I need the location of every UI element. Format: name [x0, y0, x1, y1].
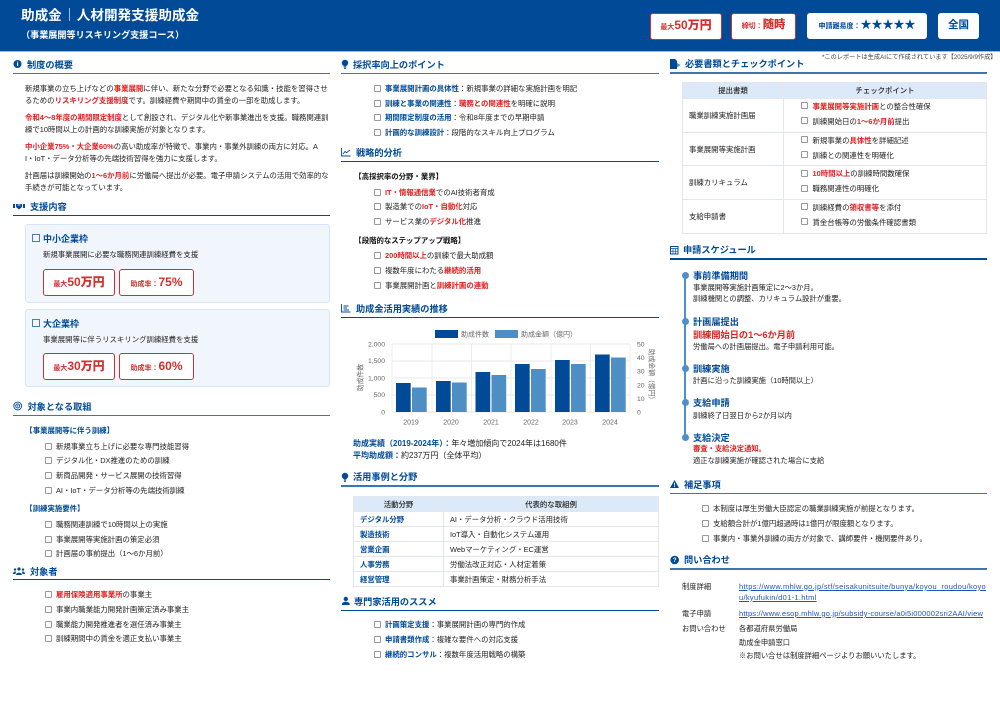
step: training: 訓練実施	[693, 364, 730, 374]
list: requirements: 職務関連訓練で10時間以上の実施	[56, 520, 168, 529]
icon: light bulb	[342, 472, 348, 482]
table: 労働法改正対応・人材定着策	[450, 560, 546, 568]
step: claim: 支給申請	[693, 398, 730, 408]
badge: max	[43, 269, 115, 296]
panel: eligible activities	[13, 402, 330, 558]
x axis: 2019	[403, 420, 419, 426]
x axis: 2022	[523, 420, 539, 426]
card description: 新規事業展開に必要な職務関連訓練経費を支援	[43, 250, 198, 259]
checklist table: 訓練カリキュラム	[689, 178, 748, 187]
contact: details URL: 制度詳細	[682, 582, 711, 591]
heading: 補足事項	[684, 480, 721, 490]
list	[670, 502, 987, 544]
table: 経営管理	[360, 574, 390, 584]
list: 訓練と事業の関連性：職務との関連性を明確に説明	[385, 99, 555, 108]
contact: inquiries: 各都道府県労働局	[739, 624, 797, 633]
panel: supplementary notes	[670, 477, 987, 545]
badge: difficulty	[807, 13, 927, 38]
checklist table: 事業展開等実施計画との整合性確保	[812, 102, 931, 111]
badge: max: 最大30万円	[53, 359, 105, 373]
list: training: 新商品開発・サービス展開の技術習得	[56, 471, 182, 480]
heading: 活用事例と分野	[353, 472, 417, 482]
checklist table: 訓練開始日の1〜6か月前提出	[812, 117, 909, 126]
checklist table: 訓練経費の領収書等を添付	[812, 203, 901, 212]
heading: 専門家活用のススメ	[354, 597, 437, 607]
step: plan submission	[682, 317, 839, 351]
checklist table: 職業訓練実施計画届	[689, 111, 756, 120]
table: AI・データ分析・クラウド活用技術	[450, 514, 568, 524]
list	[45, 590, 189, 643]
badge: difficulty: 申請難易度：★★★★★	[818, 19, 916, 31]
table: 製造技術	[360, 530, 390, 538]
left axis: 500	[374, 392, 385, 399]
card: SME	[25, 224, 330, 303]
table: 営業企画	[360, 544, 390, 554]
list: 雇用保険適用事業所の事業主	[56, 590, 152, 599]
chart summary	[353, 439, 567, 460]
step: preparation: 事業展開等実施計画策定に2〜3か月。	[693, 283, 818, 292]
card description: 事業展開等に伴うリスキリング訓練経費を支援	[43, 335, 198, 344]
list: 期間限定制度の活用：令和8年度までの早期申請	[385, 113, 544, 122]
badge: maximum amount: 最大50万円	[660, 18, 712, 32]
x axis	[403, 420, 618, 426]
step: preparation: 事前準備期間	[693, 271, 748, 281]
icon: people	[13, 567, 25, 575]
list: 訓練期間中の賃金を適正支払い事業主	[56, 634, 182, 643]
panel: overview	[13, 60, 330, 192]
title: 助成金 人材開発支援助成金	[21, 8, 199, 23]
badge: rate: 助成率：60%	[130, 359, 183, 373]
table: デジタル分野	[360, 514, 404, 524]
table: IoT導入・自動化システム運用	[450, 530, 549, 538]
contact: inquiries: ※お問い合せは制度詳細ページよりお願いいたします。	[739, 651, 920, 660]
list: sectors: IT・情報通信業でのAI技術者育成	[385, 188, 495, 197]
panel: application schedule	[670, 245, 987, 465]
list: 計画策定支援：事業展開計画の専門的作成	[385, 620, 525, 629]
step: claim: 訓練終了日翌日から2か月以内	[693, 411, 792, 420]
icon: info	[14, 60, 22, 68]
table: 代表的な取組例	[525, 500, 577, 508]
heading: 採択率向上のポイント	[353, 60, 445, 70]
overview text: 新規事業の立ち上げなどの事業展開に伴い、新たな分野で必要となる知識・技能を習得させ	[25, 84, 328, 93]
list: step-up: 事業展開計画と訓練計画の連動	[385, 281, 488, 290]
right axis: 40	[637, 355, 645, 362]
overview text: I・IoT・データ分析等の先端技術習得を強力に支援します。	[25, 154, 222, 163]
left axis: 1,000	[368, 376, 385, 382]
contact: inquiries: お問い合わせ	[682, 624, 726, 633]
checklist table: 提出書類	[718, 86, 748, 95]
badge: deadline: 締切：随時	[742, 19, 785, 31]
card title: 大企業枠	[43, 318, 79, 328]
checklist table: チェックポイント	[855, 86, 915, 95]
step: plan submission: 労働局への計画届提出。電子申請利用可能。	[693, 342, 839, 351]
panel: expert use	[341, 596, 659, 659]
contact: details URL: u/kyufukin/d01-1.html	[739, 593, 817, 602]
heading: 助成金活用実績の推移	[356, 304, 448, 314]
checklist table: 事業展開等実施計画	[689, 145, 756, 154]
heading: 対象者	[30, 567, 58, 577]
checklist table: 10時間以上の訓練時間数確保	[812, 169, 909, 178]
heading: 戦略的分析	[356, 148, 402, 158]
badge: max: 最大50万円	[53, 275, 105, 289]
x axis: 2021	[483, 420, 499, 426]
timeline line	[684, 275, 686, 437]
chart summary: 平均助成額：約237万円（全体平均）	[353, 451, 486, 460]
checklist table: 支給申請書	[689, 212, 726, 221]
left axis: 助成件数	[356, 364, 364, 391]
panel: adoption tips	[341, 60, 659, 137]
icon: target	[13, 402, 22, 410]
list: training: デジタル化・DX推進のための訓練	[56, 456, 170, 465]
left axis: 2,000	[368, 342, 385, 348]
step: decision	[670, 431, 987, 467]
table: Webマーケティング・EC運営	[450, 544, 549, 554]
panel: strategic analysis	[341, 148, 659, 290]
list: training: AI・IoT・データ分析等の先端技術訓練	[56, 486, 185, 495]
contact: inquiries: 助成金申請窓口	[739, 638, 790, 647]
list: sectors: 製造業でのIoT・自動化対応	[385, 202, 477, 211]
step: plan submission: 訓練開始日の1〜6か月前	[693, 330, 795, 340]
list: step-up: 複数年度にわたる継続的活用	[385, 266, 481, 275]
right axis	[637, 342, 656, 416]
bar chart	[356, 330, 656, 426]
table	[353, 496, 659, 587]
list: 支給額合計が1億円超過時は1億円が限度額となります。	[713, 519, 898, 528]
table: 活動分野	[384, 500, 413, 508]
checklist table: 賃金台帳等の労働条件確認書類	[812, 218, 916, 227]
badge: max	[43, 353, 115, 380]
heading: 問い合わせ	[684, 555, 730, 565]
subheading: 【事業展開等に伴う訓練】	[25, 426, 114, 435]
step: plan submission: 計画届提出	[693, 317, 739, 327]
icon: light bulb	[342, 60, 348, 69]
contact: e-application URL: https://www.esop.mhlw.go.jp/subsidy-course/a0i5i000002sri2AAI/view	[739, 609, 983, 618]
panel: required documents	[670, 59, 987, 234]
AI generation note: *このレポートは生成AIにて作成されています【2025/9/9作成】	[822, 54, 996, 61]
bars: grant amount	[412, 358, 626, 412]
badge: maximum amount	[650, 13, 722, 40]
legend: 助成金額（億円）	[521, 330, 577, 338]
right axis: 30	[637, 368, 645, 376]
badge: region: 全国	[948, 19, 969, 31]
step: preparation	[682, 271, 846, 303]
panel: target persons	[13, 567, 330, 643]
left axis: 1,500	[368, 358, 385, 365]
contact: details URL: https://www.mhlw.go.jp/stf/seisakunitsuite/bunya/koyou_roudou/koyo	[739, 582, 986, 591]
heading: 支援内容	[30, 202, 67, 212]
contact: e-application URL: 電子申請	[682, 609, 711, 618]
badge: rate: 助成率：75%	[130, 275, 183, 289]
list	[374, 84, 577, 137]
step: decision: 支給決定	[693, 433, 730, 443]
checklist table: 訓練との関連性を明確化	[812, 151, 894, 160]
icon: question: ?	[673, 558, 677, 564]
checklist table: 職務関連性の明確化	[812, 184, 879, 193]
chart summary: 助成実績（2019-2024年）：年々増加傾向で2024年は1680件	[353, 439, 567, 448]
list: 本制度は厚生労働大臣認定の職業訓練実施が前提となります。	[713, 504, 919, 513]
card title: 中小企業枠	[43, 234, 88, 244]
list: training: 新規事業立ち上げに必要な専門技能習得	[56, 442, 189, 451]
overview text: 練で10時間以上の計画的な訓練実施が対象となります。	[25, 125, 210, 134]
overview text: るためのリスキリング支援制度です。訓練経費や期間中の賃金の一部を助成します。	[25, 96, 304, 105]
badge: region	[938, 13, 979, 38]
icon: warning	[670, 479, 680, 489]
table: 人事労務	[360, 560, 390, 568]
step: claim	[670, 396, 987, 421]
left axis: 0	[381, 410, 385, 416]
list: requirements: 事業展開等実施計画の策定必須	[56, 535, 159, 544]
x axis: 2020	[443, 420, 459, 426]
x axis: 2023	[562, 420, 578, 426]
panel: use cases	[341, 472, 659, 587]
list: step-up: 200時間以上の訓練で最大助成額	[385, 251, 493, 260]
list: 計画的な訓練設計：段階的なスキル向上プログラム	[385, 128, 555, 137]
overview text: 手続きが可能となっています。	[25, 183, 127, 192]
list: 継続的コンサル：複数年度活用戦略の構築	[385, 650, 525, 659]
x axis: 2024	[602, 420, 618, 426]
left axis	[356, 342, 385, 416]
icon: calendar	[670, 246, 678, 254]
list: sectors: サービス業のデジタル化推進	[385, 217, 481, 226]
icon: document	[670, 59, 680, 69]
bars: grants count	[396, 354, 610, 412]
heading: 制度の概要	[27, 60, 73, 70]
step: decision: 適正な訓練実施が確認された場合に支給	[693, 456, 824, 465]
panel: contact	[670, 552, 987, 662]
header band	[0, 0, 1000, 52]
list: requirements: 計画届の事前提出（1〜6か月前）	[56, 549, 168, 558]
subheading: 【訓練実施要件】	[25, 504, 84, 513]
subheading: 【高採択率の分野・業界】	[354, 172, 443, 181]
right axis: 助成金額（億円）	[648, 349, 656, 403]
heading: 対象となる取組	[28, 402, 92, 412]
badge: rate	[119, 269, 194, 296]
badge: deadline	[731, 13, 796, 40]
right axis: 10	[637, 396, 645, 403]
overview text	[25, 84, 329, 192]
step: preparation: 訓練機関との調整、カリキュラム設計が重要。	[693, 294, 846, 303]
list: requirements	[45, 520, 168, 558]
overview text: 令和4〜8年度の期間限定制度として創設され、デジタル化や新事業進出を支援。職務関連訓	[25, 113, 329, 122]
legend: 助成件数	[461, 330, 489, 338]
checklist table	[682, 82, 987, 234]
contact: inquiries	[670, 622, 987, 661]
contact: e-application URL	[670, 607, 987, 619]
card: large enterprise	[25, 309, 330, 387]
contact: details URL	[670, 580, 987, 603]
right axis: 20	[637, 382, 645, 390]
list: 職業能力開発推進者を選任済み事業主	[56, 620, 182, 629]
icon: handshake	[13, 204, 25, 210]
right axis: 0	[637, 410, 641, 416]
icon: bar chart	[341, 304, 350, 312]
list: step-up	[374, 251, 494, 290]
table: 事業計画策定・財務分析手法	[450, 574, 546, 584]
legend	[435, 330, 577, 338]
step: training	[682, 364, 818, 385]
checklist table: 新規事業の具体性を詳細記述	[812, 136, 909, 145]
panel: support content	[13, 202, 330, 387]
list	[374, 620, 526, 659]
panel: usage trend	[341, 304, 659, 460]
list: sectors	[374, 188, 495, 226]
list: training	[45, 442, 189, 495]
subtitle: （事業展開等リスキリング支援コース）	[21, 30, 184, 40]
badge: rate	[119, 353, 194, 380]
right axis: 50	[637, 342, 645, 348]
overview text: 計画届は訓練開始の1〜6か月前に労働局へ提出が必要。電子申請システムの活用で効率的な	[25, 171, 329, 180]
subheading: 【段階的なステップアップ戦略】	[354, 236, 465, 245]
icon: line chart	[341, 148, 350, 156]
list: 事業内職業能力開発計画策定済み事業主	[56, 605, 189, 614]
step: training: 計画に沿った訓練実施（10時間以上）	[693, 376, 818, 385]
icon: question	[670, 554, 680, 564]
list: 事業展開計画の具体性：新規事業の詳細な実施計画を明記	[385, 84, 577, 93]
overview text: 中小企業75%・大企業60%の高い助成率が特徴で、事業内・事業外訓練の両方に対応。A	[25, 142, 318, 151]
heading: 申請スケジュール	[683, 245, 756, 255]
step: decision: 審査・支給決定通知。	[693, 444, 766, 453]
heading: 必要書類とチェックポイント	[685, 59, 804, 69]
list: 事業内・事業外訓練の両方が対象で、講師要件・機関要件あり。	[713, 534, 927, 543]
icon: expert	[342, 596, 350, 605]
list: 申請書類作成：複雑な要件への対応支援	[385, 635, 518, 644]
